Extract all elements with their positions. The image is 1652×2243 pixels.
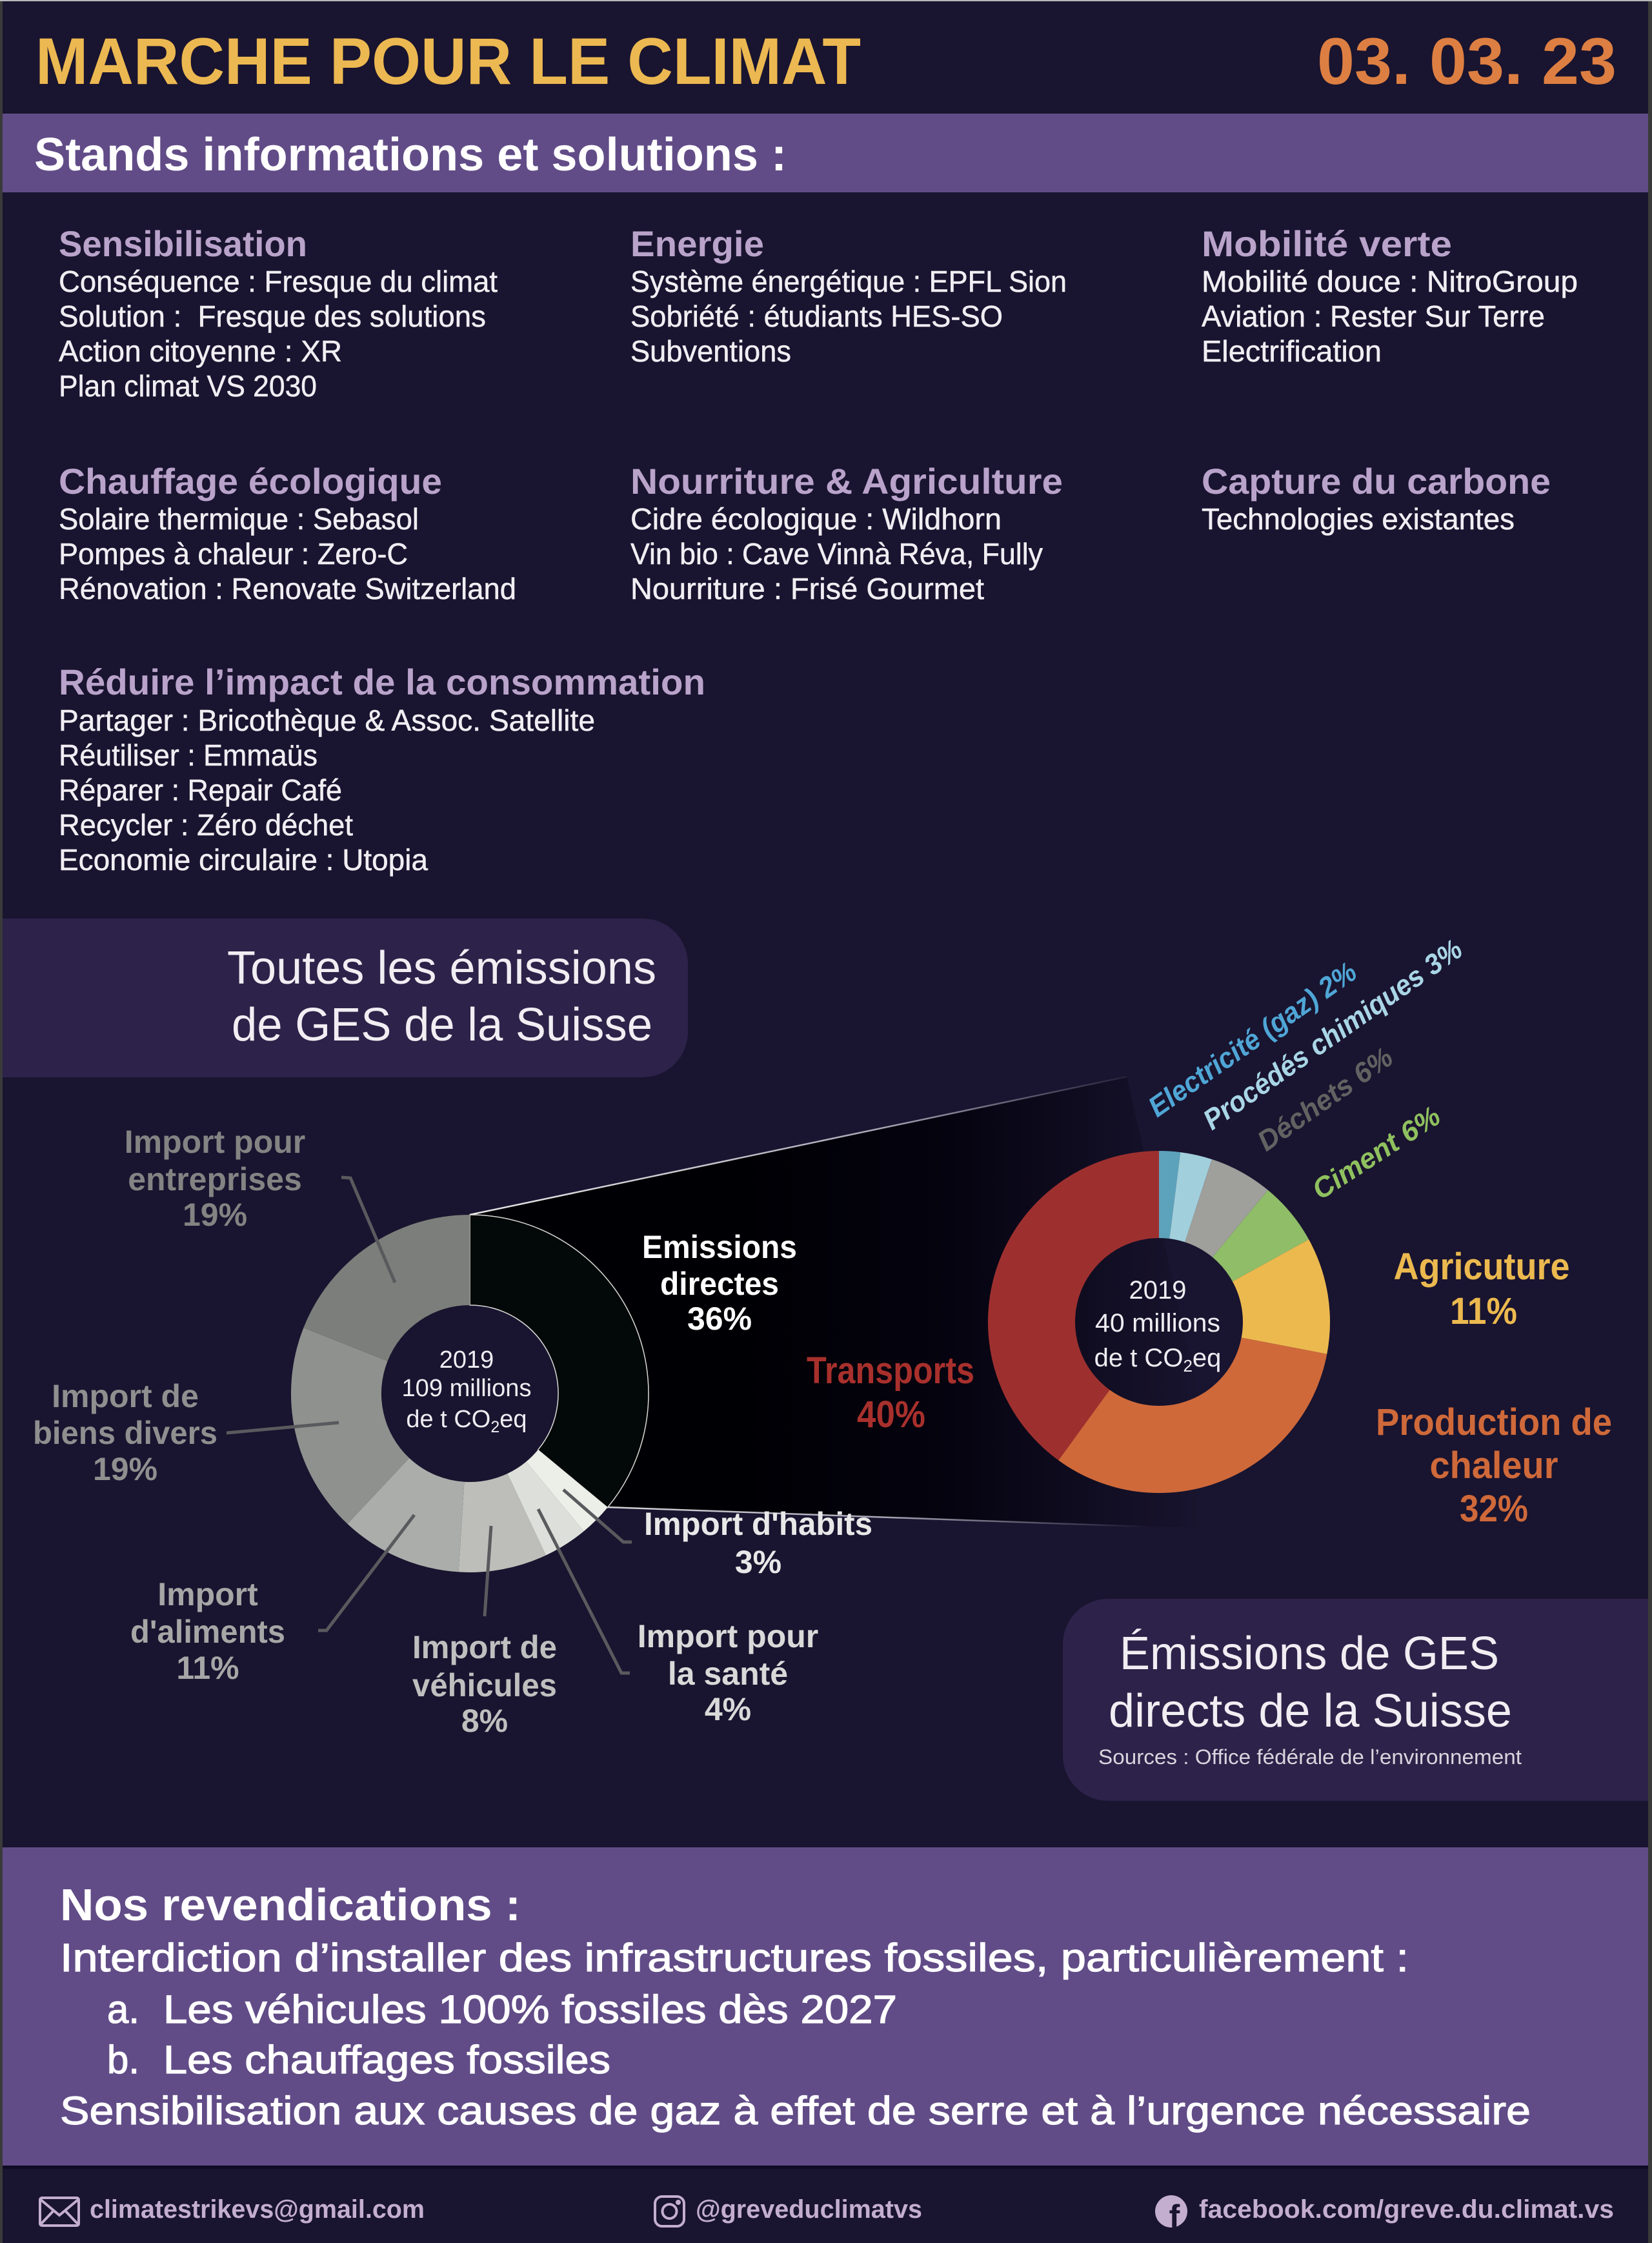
label: import santé: Import pour — [638, 1618, 818, 1654]
label: emissions directes: directes — [660, 1266, 779, 1302]
donut centre label — [1094, 1276, 1221, 1375]
label: import biens divers: Import de — [52, 1378, 199, 1414]
text block: Energie: Sobriété : étudiants HES-SO — [630, 299, 1003, 333]
donut chart: all emissions — [291, 1215, 649, 1572]
footer: instagram: @greveduclimatvs — [696, 2195, 922, 2224]
text block: Chauffage écologique — [59, 461, 516, 605]
zoom wedge: direct emissions expansion — [470, 1077, 1229, 1530]
segment: agriculture 11% — [1233, 1239, 1330, 1354]
label: transports: Transports — [807, 1350, 974, 1392]
label: import habits: 3% — [735, 1544, 781, 1580]
label: agriculture: 11% — [1450, 1290, 1517, 1332]
text block: Sensibilisation: Sensibilisation — [59, 223, 307, 264]
text block: Nourriture & Agriculture: Nourriture & Agriculture — [630, 461, 1063, 502]
label: import aliments: 11% — [176, 1650, 239, 1686]
text block: Réduire l'impact: Recycler : Zéro déchet — [59, 808, 353, 842]
text block: Energie: Subventions — [630, 334, 791, 368]
label: emissions directes: Emissions — [642, 1229, 797, 1265]
panel: nos revendications: Les chauffages fossiles — [163, 2038, 610, 2082]
label: import véhicules: 8% — [461, 1703, 508, 1739]
text block: Capture du carbone: Capture du carbone — [1202, 461, 1551, 502]
panel: nos revendications: a. — [107, 1987, 139, 2031]
icon: facebook — [1155, 2195, 1187, 2235]
panel: toutes les émissions heading — [3, 919, 688, 1077]
label: agriculture: Agricuture — [1394, 1246, 1569, 1288]
text block: Capture du carbone — [1202, 461, 1551, 536]
label: import biens divers: biens divers — [33, 1415, 217, 1451]
text block: Chauffage écologique: Chauffage écologique — [59, 461, 442, 502]
panel: nos revendications: b. — [107, 2038, 139, 2082]
text block: Energie: Energie — [630, 223, 764, 264]
text block: Nourriture & Agriculture — [630, 461, 1063, 605]
text block: Mobilité verte: Electrification — [1202, 334, 1382, 368]
segment: import habits 3% — [526, 1450, 607, 1531]
heading: stands: Stands informations et solutions : — [34, 129, 787, 181]
text block: Mobilité verte: Mobilité verte — [1202, 223, 1452, 264]
label: électricité: Electricité (gaz) 2% — [1143, 956, 1363, 1123]
text block: Nourriture & Agriculture: Vin bio : Cave Vinnà Réva, Fully — [630, 537, 1043, 571]
label: import habits — [644, 1506, 872, 1580]
text block: Chauffage écologique: Rénovation : Renovate Switzerland — [59, 572, 516, 605]
label: production de chaleur — [1376, 1401, 1612, 1530]
text block: Capture du carbone: Technologies existantes — [1202, 502, 1515, 536]
text block: Chauffage écologique: Solaire thermique : Sebasol — [59, 502, 419, 536]
segment: import santé 4% — [507, 1462, 584, 1556]
text block: Réduire l'impact: Réparer : Repair Café — [59, 773, 342, 807]
label: import habits: Import d'habits — [644, 1506, 872, 1542]
label: import biens divers — [33, 1378, 217, 1487]
label: import santé: la santé — [668, 1656, 788, 1692]
label: transports — [807, 1350, 974, 1436]
text block: Energie — [630, 223, 1067, 368]
label: import entreprises — [125, 1124, 305, 1233]
segment: procédés chimiques 3% — [1169, 1152, 1212, 1242]
footer: facebook: facebook.com/greve.du.climat.vs — [1199, 2195, 1614, 2224]
donut centre label — [401, 1346, 532, 1436]
label: import santé — [638, 1618, 818, 1727]
segment: déchets 6% — [1185, 1159, 1268, 1257]
label: import véhicules — [412, 1629, 557, 1739]
heading: nos revendications: Nos revendications : — [60, 1880, 521, 1930]
label: import entreprises: 19% — [183, 1197, 247, 1233]
text block: Sensibilisation: Action citoyenne : XR — [59, 334, 342, 368]
label: import entreprises: Import pour — [125, 1124, 305, 1160]
label: ciment: Ciment 6% — [1307, 1100, 1446, 1206]
donut centre label: 2 — [1183, 1356, 1193, 1375]
label: import aliments: d'aliments — [130, 1614, 285, 1650]
text block: Energie: Système énergétique : EPFL Sion — [630, 265, 1067, 298]
text block: Sensibilisation — [59, 223, 498, 403]
text block: Mobilité verte: Aviation : Rester Sur Terre — [1202, 299, 1545, 333]
donut centre label: de t CO — [1094, 1344, 1183, 1372]
panel: émissions directes heading: Sources : Office fédérale de l’environnement — [1098, 1745, 1522, 1769]
panel: nos revendications: Les véhicules 100% fossiles dès 2027 — [163, 1987, 897, 2031]
label: import aliments — [130, 1576, 285, 1686]
icon: envelope — [40, 2198, 79, 2226]
segment: import véhicules 8% — [459, 1474, 546, 1572]
panel: stands heading band — [3, 114, 1648, 192]
footer: facebook — [1155, 2195, 1614, 2235]
label: production de chaleur: chaleur — [1430, 1445, 1558, 1487]
text block: Réduire l'impact — [59, 662, 705, 877]
donut centre label: 2019 — [1129, 1276, 1186, 1304]
label: emissions directes: 36% — [687, 1301, 752, 1337]
panel: émissions directes heading — [1063, 1599, 1648, 1801]
text block: Réduire l'impact: Economie circulaire : Utopia — [59, 843, 428, 877]
donut centre label: 40 millions — [1095, 1309, 1220, 1337]
label: import entreprises: entreprises — [128, 1161, 302, 1197]
label: déchets: Déchets 6% — [1252, 1041, 1399, 1157]
text block: Sensibilisation: Plan climat VS 2030 — [59, 369, 317, 403]
panel: nos revendications — [3, 1847, 1648, 2169]
donut centre label: 2 — [490, 1418, 499, 1436]
segment: transports 40% — [988, 1151, 1159, 1460]
text block: Sensibilisation: Conséquence : Fresque du climat — [59, 265, 498, 298]
panel: nos revendications: Sensibilisation aux causes de gaz à effet de serre et à l’urgence nécessaire — [60, 2089, 1531, 2133]
label: emissions directes — [642, 1229, 797, 1337]
panel: émissions directes heading: Émissions de GES — [1120, 1628, 1499, 1680]
panel: nos revendications: Interdiction d’installer des infrastructures fossiles, particulièrement : — [60, 1936, 1409, 1980]
text block: Nourriture & Agriculture: Nourriture : Frisé Gourmet — [630, 572, 984, 605]
text block: Sensibilisation: Solution : Fresque des solutions — [59, 299, 486, 333]
leader lines: left donut — [227, 1177, 632, 1673]
label: agriculture — [1394, 1246, 1569, 1332]
donut centre label: 2019 — [439, 1346, 494, 1374]
label: import aliments: Import — [157, 1576, 258, 1612]
panel: toutes les émissions heading: de GES de la Suisse — [232, 999, 652, 1051]
title: MARCHE POUR LE CLIMAT — [35, 25, 861, 98]
segment: emissions directes 36% — [470, 1215, 649, 1508]
donut centre label: eq — [499, 1406, 527, 1433]
panel: émissions directes heading: directs de la Suisse — [1109, 1685, 1512, 1737]
text block: Nourriture & Agriculture: Cidre écologique : Wildhorn — [630, 502, 1002, 536]
donut centre label: de t CO — [406, 1406, 490, 1433]
label: procédés chimiques: Procédés chimiques 3% — [1198, 933, 1468, 1136]
segment: ciment 6% — [1213, 1190, 1309, 1281]
panel: toutes les émissions heading: Toutes les émissions — [227, 942, 656, 994]
segment: électricité 2% — [1159, 1151, 1180, 1239]
segment: import aliments 11% — [347, 1458, 464, 1572]
donut centre label: 109 millions — [401, 1375, 532, 1402]
icon: instagram — [655, 2197, 684, 2226]
text block: Chauffage écologique: Pompes à chaleur : Zero-C — [59, 537, 408, 571]
label: import véhicules: véhicules — [412, 1667, 557, 1703]
label: import santé: 4% — [705, 1691, 751, 1727]
label: transports: 40% — [857, 1394, 925, 1436]
label: production de chaleur: Production de — [1376, 1401, 1612, 1443]
text block: Réduire l'impact: Réutiliser : Emmaüs — [59, 738, 317, 772]
label: production de chaleur: 32% — [1460, 1488, 1528, 1530]
text block: Mobilité verte — [1202, 223, 1578, 368]
segment: production de chaleur 32% — [1058, 1337, 1327, 1493]
text block: Réduire l'impact: Réduire l’impact de la consommation — [59, 662, 705, 702]
segment: import biens divers 19% — [291, 1328, 409, 1524]
donut centre label: eq — [1193, 1344, 1221, 1372]
icon: facebook: f — [1169, 2198, 1180, 2235]
donut chart: direct emissions — [988, 1151, 1330, 1493]
text block: Réduire l'impact: Partager : Bricothèque & Assoc. Satellite — [59, 704, 595, 737]
footer: email: climatestrikevs@gmail.com — [90, 2195, 425, 2224]
label: import biens divers: 19% — [93, 1451, 157, 1487]
segment: import entreprises 19% — [303, 1215, 470, 1361]
label: import véhicules: Import de — [412, 1629, 557, 1665]
date: 03. 03. 23 — [1317, 25, 1617, 98]
text block: Mobilité verte: Mobilité douce : NitroGroup — [1202, 265, 1578, 298]
